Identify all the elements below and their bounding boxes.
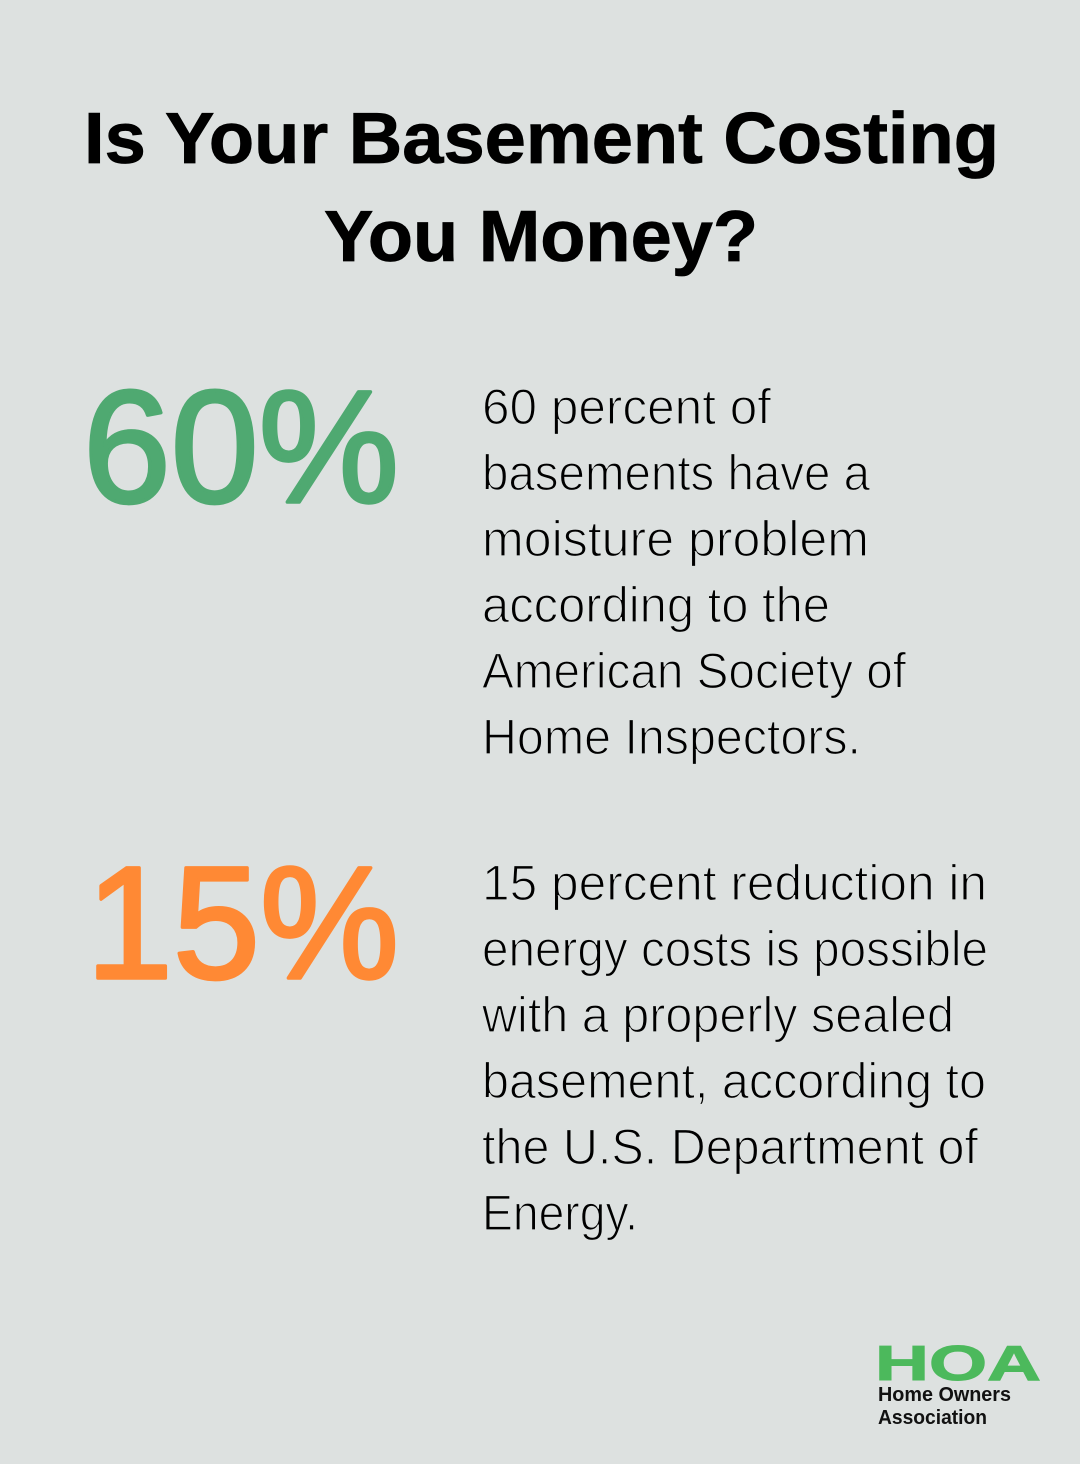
text block: moisture problem description: moisture problem [482, 511, 869, 567]
logo: Home Owners Association: Home Owners [878, 1384, 1011, 1406]
logo: Home Owners Association [875, 1337, 1041, 1429]
text block: energy cost description: basement, according to [482, 1053, 986, 1109]
logo: Home Owners Association: HOA [875, 1337, 1041, 1391]
text block: energy cost description: 15 percent reduction in [482, 855, 987, 911]
stat number: 60%: 60% [83, 357, 399, 536]
text block: moisture problem description: Home Inspectors. [482, 709, 861, 765]
text block: energy cost description: energy costs is possible [482, 921, 988, 977]
text block: moisture problem description: American Society of [482, 643, 906, 699]
text block: energy cost description: the U.S. Department of [482, 1119, 978, 1175]
title: Is Your Basement Costing [84, 99, 999, 179]
text block: energy cost description: Energy. [482, 1185, 638, 1241]
title [84, 99, 999, 277]
title: You Money? [324, 197, 758, 277]
text block: moisture problem description: basements have a [482, 445, 870, 501]
stat number: 15%: 15% [86, 833, 399, 1012]
text block: moisture problem description: 60 percent of [482, 379, 771, 435]
text block: moisture problem description: according to the [482, 577, 830, 633]
text block: energy cost description: with a properly sealed [481, 987, 954, 1043]
panel: 15 percent stat [86, 833, 988, 1241]
logo: Home Owners Association: Association [878, 1407, 987, 1429]
text block: moisture problem description [482, 379, 906, 765]
panel: 60 percent stat [83, 357, 906, 765]
text block: energy cost description [481, 855, 988, 1241]
